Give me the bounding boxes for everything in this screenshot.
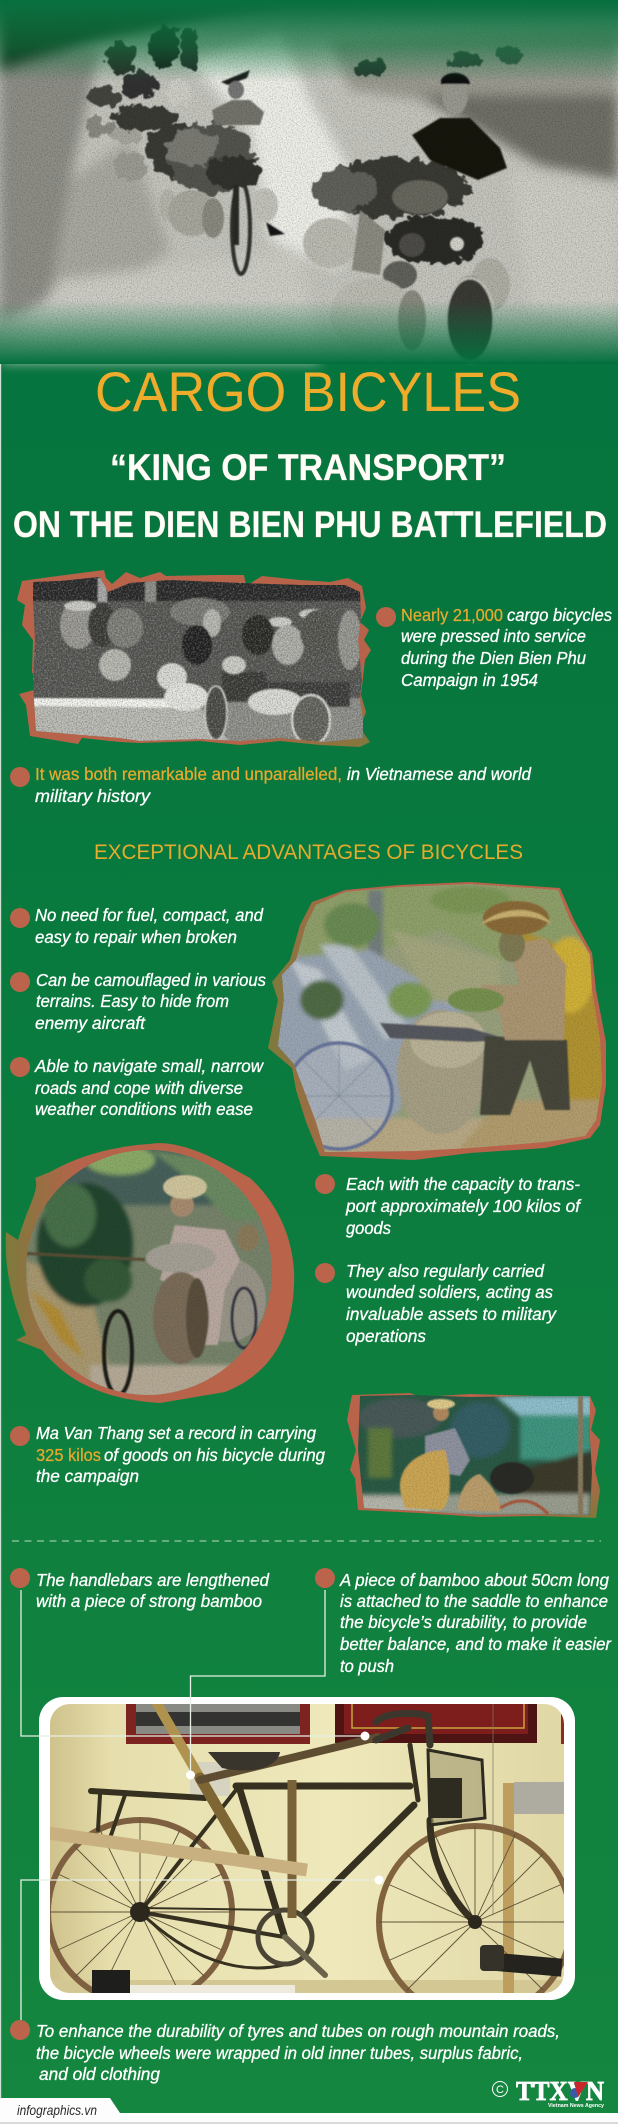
- photo panel: restored cargo bicycle: [39, 1697, 575, 2018]
- rear riders: [107, 42, 137, 74]
- subtitle: King of Transport: “KING OF TRANSPORT”: [110, 447, 506, 488]
- wall frames: [126, 1700, 564, 1744]
- bullet text: capacity 100 kilos: Each with the capacity to trans-: [346, 1174, 580, 1194]
- photo panel: Ma Van Thang diorama: [347, 1392, 600, 1518]
- photo grain: [0, 0, 618, 362]
- saddle: [208, 1752, 280, 1770]
- bullet text: handlebars: The handlebars are lengthened: [36, 1570, 270, 1590]
- bullet text: tyres and tubes: the bicycle wheels were wrapped in old inner tubes, surplus fabric,: [36, 2043, 523, 2063]
- front rider cargo: [320, 158, 470, 218]
- footer tab: infographics.vn: infographics.vn: [17, 2102, 97, 2118]
- bamboo pieces: [155, 1700, 200, 1778]
- chainring and crank: [258, 1910, 312, 1964]
- bullet text: wounded soldiers: wounded soldiers, acting as: [346, 1282, 553, 1302]
- middle rider: [168, 122, 256, 194]
- bullet text: bamboo saddle: A piece of bamboo about 50cm long: [339, 1570, 609, 1590]
- bullet text: camouflaged: Can be camouflaged in various: [36, 970, 266, 990]
- leader lines and dots: [21, 1590, 384, 2020]
- bullet text: narrow roads: weather conditions with ease: [35, 1099, 253, 1119]
- bullet text: wounded soldiers: They also regularly carried: [346, 1261, 545, 1281]
- bullet text: narrow roads: Able to navigate small, narrow: [34, 1056, 264, 1076]
- bullet text: handlebars: [10, 1568, 270, 1611]
- pedal: [497, 1954, 563, 1977]
- bullet text: no need for fuel: [10, 905, 264, 947]
- bullet text: bamboo saddle: is attached to the saddle to enhance: [340, 1591, 608, 1611]
- photo panel: diorama soldier with bicycle: [265, 880, 610, 1160]
- bullet text: tyres and tubes: To enhance the durability of tyres and tubes on rough mountain roads,: [36, 2021, 560, 2041]
- bullet text: narrow roads: [10, 1056, 264, 1119]
- bullet text: tyres and tubes: and old clothing: [39, 2064, 160, 2084]
- bullet text: Nearly 21,000 cargo bicycles: Nearly 21,000: [401, 605, 503, 625]
- bullet text: remarkable and unparalleled: [10, 764, 532, 806]
- bullet text: no need for fuel: easy to repair when broken: [35, 927, 237, 947]
- bullet text: capacity 100 kilos: [315, 1174, 582, 1238]
- bullet text: narrow roads: roads and cope with diverse: [35, 1078, 243, 1098]
- logo: TTXVN copyright: [492, 2076, 605, 2109]
- bullet text: Ma Van Thang record: [10, 1423, 325, 1486]
- front rider: [442, 75, 468, 115]
- handlebar: [376, 1714, 430, 1745]
- bullet text: wounded soldiers: operations: [346, 1326, 426, 1346]
- bullet text: remarkable and unparalleled: in Vietnamese and world: [347, 764, 532, 784]
- bullet text: camouflaged: enemy aircraft: [35, 1013, 146, 1033]
- logo: TTXVN copyright: C: [496, 2084, 504, 2096]
- bullet text: bamboo saddle: better balance, and to make it easier: [340, 1634, 612, 1654]
- bullet text: capacity 100 kilos: goods: [346, 1218, 391, 1238]
- basket: [428, 1750, 485, 1825]
- front wheel: [376, 1823, 564, 1993]
- bullet text: bamboo saddle: to push: [340, 1656, 394, 1676]
- logo: TTXVN copyright: TTXVN: [516, 2076, 604, 2106]
- bullet text: wounded soldiers: [315, 1261, 557, 1346]
- photo panel: group portrait with jagged frame: [17, 570, 371, 750]
- post and sign: [503, 1783, 514, 1993]
- bullet text: no need for fuel: No need for fuel, compact, and: [35, 905, 264, 925]
- bullet text: Ma Van Thang record: the campaign: [36, 1466, 139, 1486]
- bullet text: tyres and tubes: [10, 2020, 560, 2084]
- hero photo: cargo bicycles on road: [0, 0, 618, 364]
- middle rider figure: [221, 70, 250, 85]
- bullet text: Ma Van Thang record: of goods on his bicycle during: [104, 1445, 325, 1465]
- bullet text: wounded soldiers: invaluable assets to military: [346, 1304, 557, 1324]
- logo: TTXVN copyright: Vietnam News Agency: [548, 2103, 605, 2109]
- bullet text: bamboo saddle: the bicycle’s durability, to provide: [340, 1612, 587, 1632]
- photo panel: round diorama with jagged ring: [6, 1143, 294, 1403]
- bullet text: Nearly 21,000 cargo bicycles: during the Dien Bien Phu: [401, 648, 586, 668]
- bullet text: bamboo saddle: [315, 1568, 612, 1676]
- bullet text: Nearly 21,000 cargo bicycles: cargo bicycles: [507, 605, 612, 625]
- heading: exceptional advantages: EXCEPTIONAL ADVANTAGES OF BICYCLES: [94, 841, 523, 864]
- bullet text: Nearly 21,000 cargo bicycles: were pressed into service: [401, 626, 586, 646]
- bullet text: Ma Van Thang record: 325 kilos: [36, 1445, 101, 1465]
- rear wheel: [48, 1820, 232, 2004]
- bullet text: remarkable and unparalleled: military history: [35, 786, 151, 806]
- bullet text: camouflaged: terrains. Easy to hide from: [36, 991, 229, 1011]
- bullet text: Nearly 21,000 cargo bicycles: Campaign in 1954: [401, 670, 538, 690]
- footer tab: infographics.vn: [0, 2098, 618, 2124]
- bullet text: handlebars: with a piece of strong bamboo: [36, 1591, 262, 1611]
- title: CARGO BICYLES: CARGO BICYLES: [95, 360, 521, 423]
- bullet text: Ma Van Thang record: Ma Van Thang set a record in carrying: [36, 1423, 316, 1443]
- bullet text: capacity 100 kilos: port approximately 100 kilos of: [345, 1196, 582, 1216]
- bullet text: Nearly 21,000 cargo bicycles: [376, 605, 612, 690]
- bullet text: remarkable and unparalleled: It was both remarkable and unparalleled,: [35, 764, 342, 784]
- frame tubes: [91, 1745, 475, 1968]
- bullet text: camouflaged: [10, 970, 266, 1033]
- items on floor: [92, 1970, 130, 1994]
